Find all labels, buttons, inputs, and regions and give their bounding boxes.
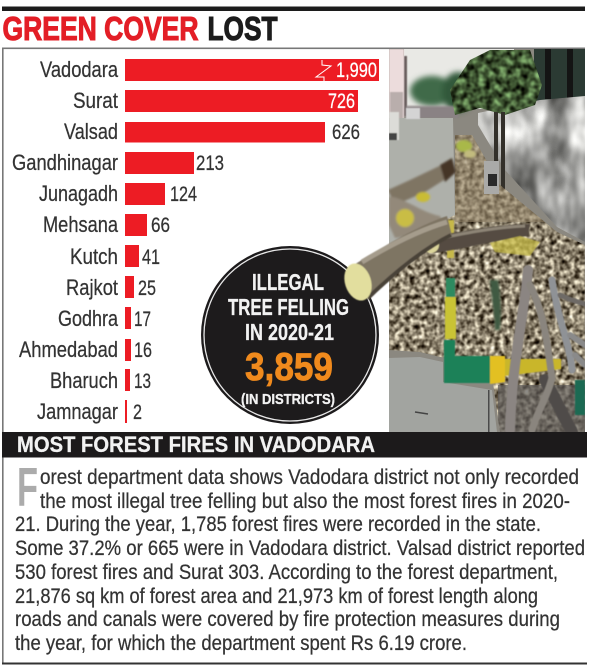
row: Valsad	[64, 119, 360, 144]
row: Kutch: 41	[142, 245, 160, 269]
callout: total tree felling: IN 2020-21	[245, 319, 334, 345]
row: Rajkot: Rajkot	[66, 275, 119, 300]
top rule	[2, 6, 585, 11]
row: Godhra: 17	[134, 307, 151, 331]
row: Jamnagar: 2	[133, 400, 142, 424]
fence	[534, 49, 585, 101]
road	[389, 118, 455, 250]
row: Godhra: Godhra	[58, 306, 118, 331]
row: Valsad: 626	[332, 120, 360, 144]
foliage	[450, 50, 542, 115]
bar chart: illegal tree felling by district	[12, 57, 379, 424]
parked vehicles	[389, 108, 420, 140]
row: Valsad: Valsad	[64, 119, 118, 144]
bin	[484, 161, 499, 194]
section header	[2, 432, 587, 458]
pavement	[389, 357, 497, 432]
row: Ahmedabad: 16	[134, 338, 152, 362]
row: Mehsana: 66	[151, 213, 170, 237]
row: Jamnagar: Jamnagar	[37, 399, 118, 424]
wall	[478, 96, 585, 246]
upper felled logs	[388, 158, 456, 238]
dead branches	[510, 270, 585, 432]
bottom rule	[2, 662, 587, 664]
mulch ground	[389, 130, 585, 432]
row: Vadodara	[40, 57, 379, 82]
building	[389, 49, 407, 121]
callout: total tree felling: (IN DISTRICTS)	[241, 391, 335, 408]
row: Junagadh	[39, 181, 197, 206]
log overlapping the callout	[340, 216, 452, 304]
callout: total tree felling	[201, 246, 379, 424]
callout: total tree felling: ILLEGAL	[252, 269, 324, 295]
row: Bharuch: Bharuch	[50, 368, 118, 393]
callout: total tree felling: 3,859	[245, 346, 333, 389]
title: LOST	[208, 11, 278, 48]
row: Gandhinagar: 213	[196, 151, 224, 175]
row: Mehsana: Mehsana	[43, 212, 118, 237]
background trees	[410, 72, 474, 112]
drop cap: F	[17, 456, 38, 518]
green plants	[456, 140, 501, 330]
body text	[15, 456, 585, 655]
row: Kutch	[70, 244, 160, 269]
row: Kutch: Kutch	[70, 244, 118, 269]
trunks	[494, 112, 505, 189]
row: Vadodara: Vadodara	[40, 57, 118, 82]
section header: MOST FOREST FIRES IN VADODARA	[17, 432, 375, 457]
row: Surat: Surat	[73, 88, 119, 113]
row: Surat	[73, 88, 358, 113]
row: Junagadh: 124	[170, 182, 197, 206]
row: Gandhinagar	[12, 150, 224, 175]
callout: total tree felling: TREE FELLING	[228, 294, 349, 320]
second log	[423, 224, 540, 256]
row: Vadodara: 1,990	[336, 58, 377, 82]
row: Surat: 726	[328, 89, 355, 113]
row: Rajkot: 25	[138, 276, 156, 300]
photo: felled trees on a footpath	[388, 49, 585, 432]
row: Gandhinagar: Gandhinagar	[12, 150, 118, 175]
curb	[444, 220, 561, 384]
row: Ahmedabad: Ahmedabad	[19, 337, 118, 362]
row: Junagadh: Junagadh	[39, 181, 118, 206]
body text: the year, for which the department spent Rs 6.19 crore.	[15, 631, 467, 655]
sky	[404, 49, 514, 109]
title: GREEN COVER	[2, 11, 198, 48]
row: Bharuch: 13	[134, 369, 151, 393]
